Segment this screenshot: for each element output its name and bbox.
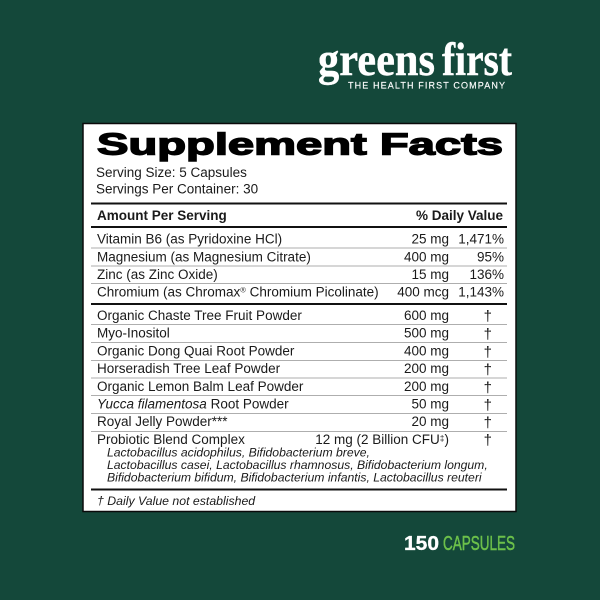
botanical ingredient rows: 400 mg bbox=[404, 344, 449, 358]
botanical ingredient rows: Organic Chaste Tree Fruit Powder bbox=[97, 308, 302, 323]
vitamins and minerals rows: 25 mg bbox=[411, 232, 449, 246]
probiotic blend: ‡ bbox=[440, 433, 445, 443]
capsule count: 150 bbox=[404, 532, 439, 555]
botanical ingredient rows: † bbox=[484, 414, 492, 432]
botanical ingredient rows: Organic Dong Quai Root Powder bbox=[97, 344, 295, 358]
vitamins and minerals rows: Magnesium (as Magnesium Citrate) bbox=[97, 250, 311, 264]
panel: supplement facts bbox=[83, 124, 516, 512]
heading: Supplement Facts: Supplement Facts bbox=[97, 126, 503, 162]
capsule count bbox=[404, 532, 515, 555]
botanical ingredient rows: † bbox=[484, 380, 492, 396]
probiotic blend: ) bbox=[444, 432, 449, 447]
capsule count: CAPSULES bbox=[443, 532, 515, 555]
botanical ingredient rows: 50 mg bbox=[411, 396, 449, 412]
botanical ingredient rows: 20 mg bbox=[411, 414, 449, 429]
vitamins and minerals rows: ® bbox=[240, 286, 246, 294]
botanical ingredient rows: Royal Jelly Powder*** bbox=[97, 414, 228, 429]
probiotic blend: Lactobacillus acidophilus, Bifidobacterium breve, bbox=[107, 446, 370, 460]
botanical ingredient rows: Organic Lemon Balm Leaf Powder bbox=[97, 379, 304, 394]
logo: greens first: greens bbox=[318, 34, 435, 86]
vitamins and minerals rows: 400 mcg bbox=[397, 284, 449, 300]
probiotic blend: 12 mg (2 Billion CFU bbox=[315, 432, 440, 447]
serving information: Serving Size: 5 Capsules bbox=[96, 165, 247, 180]
probiotic blend: Lactobacillus casei, Lactobacillus rhamnosus, Bifidobacterium longum, bbox=[107, 458, 488, 472]
logo: greens first: THE HEALTH FIRST COMPANY bbox=[348, 80, 505, 90]
vitamins and minerals rows: Zinc (as Zinc Oxide) bbox=[97, 267, 218, 282]
botanical ingredient rows: Horseradish Tree Leaf Powder bbox=[97, 361, 281, 376]
vitamins and minerals rows bbox=[91, 232, 507, 300]
vitamins and minerals rows: 1,471% bbox=[458, 232, 504, 246]
botanical ingredient rows: † bbox=[484, 362, 492, 378]
botanical ingredient rows: 600 mg bbox=[404, 308, 449, 323]
botanical ingredient rows: Myo-Inositol bbox=[97, 326, 170, 340]
probiotic blend: † bbox=[484, 432, 492, 449]
vitamins and minerals rows: 1,143% bbox=[458, 284, 504, 300]
probiotic blend bbox=[97, 432, 492, 484]
footnote: † Daily Value not established bbox=[97, 494, 256, 508]
vitamins and minerals rows: 15 mg bbox=[411, 267, 449, 282]
vitamins and minerals rows: Chromium (as Chromax bbox=[97, 284, 240, 300]
logo: greens first: first bbox=[442, 34, 512, 86]
logo: greens first bbox=[318, 34, 512, 90]
botanical ingredient rows: † bbox=[484, 326, 492, 343]
vitamins and minerals rows: Chromium Picolinate) bbox=[246, 284, 379, 300]
botanical ingredient rows: 200 mg bbox=[404, 361, 449, 376]
botanical ingredient rows: † bbox=[484, 344, 492, 361]
table header: % Daily Value bbox=[416, 208, 503, 223]
botanical ingredient rows: † bbox=[484, 397, 492, 414]
vitamins and minerals rows: 400 mg bbox=[404, 250, 449, 264]
serving information: Servings Per Container: 30 bbox=[96, 182, 258, 196]
vitamins and minerals rows: 95% bbox=[477, 250, 504, 264]
probiotic blend: Bifidobacterium bifidum, Bifidobacterium infantis, Lactobacillus reuteri bbox=[107, 470, 482, 484]
botanical ingredient rows: † bbox=[484, 308, 492, 325]
botanical ingredient rows: 200 mg bbox=[404, 379, 449, 394]
botanical ingredient rows bbox=[91, 308, 507, 432]
botanical ingredient rows: Yucca filamentosa Root Powder bbox=[97, 396, 289, 412]
probiotic blend: Probiotic Blend Complex bbox=[97, 432, 245, 447]
botanical ingredient rows: 500 mg bbox=[404, 326, 449, 340]
vitamins and minerals rows: Vitamin B6 (as Pyridoxine HCl) bbox=[97, 232, 282, 246]
table header bbox=[91, 204, 507, 227]
table header: Amount Per Serving bbox=[97, 208, 227, 223]
serving information bbox=[96, 165, 258, 196]
vitamins and minerals rows: 136% bbox=[469, 267, 504, 282]
